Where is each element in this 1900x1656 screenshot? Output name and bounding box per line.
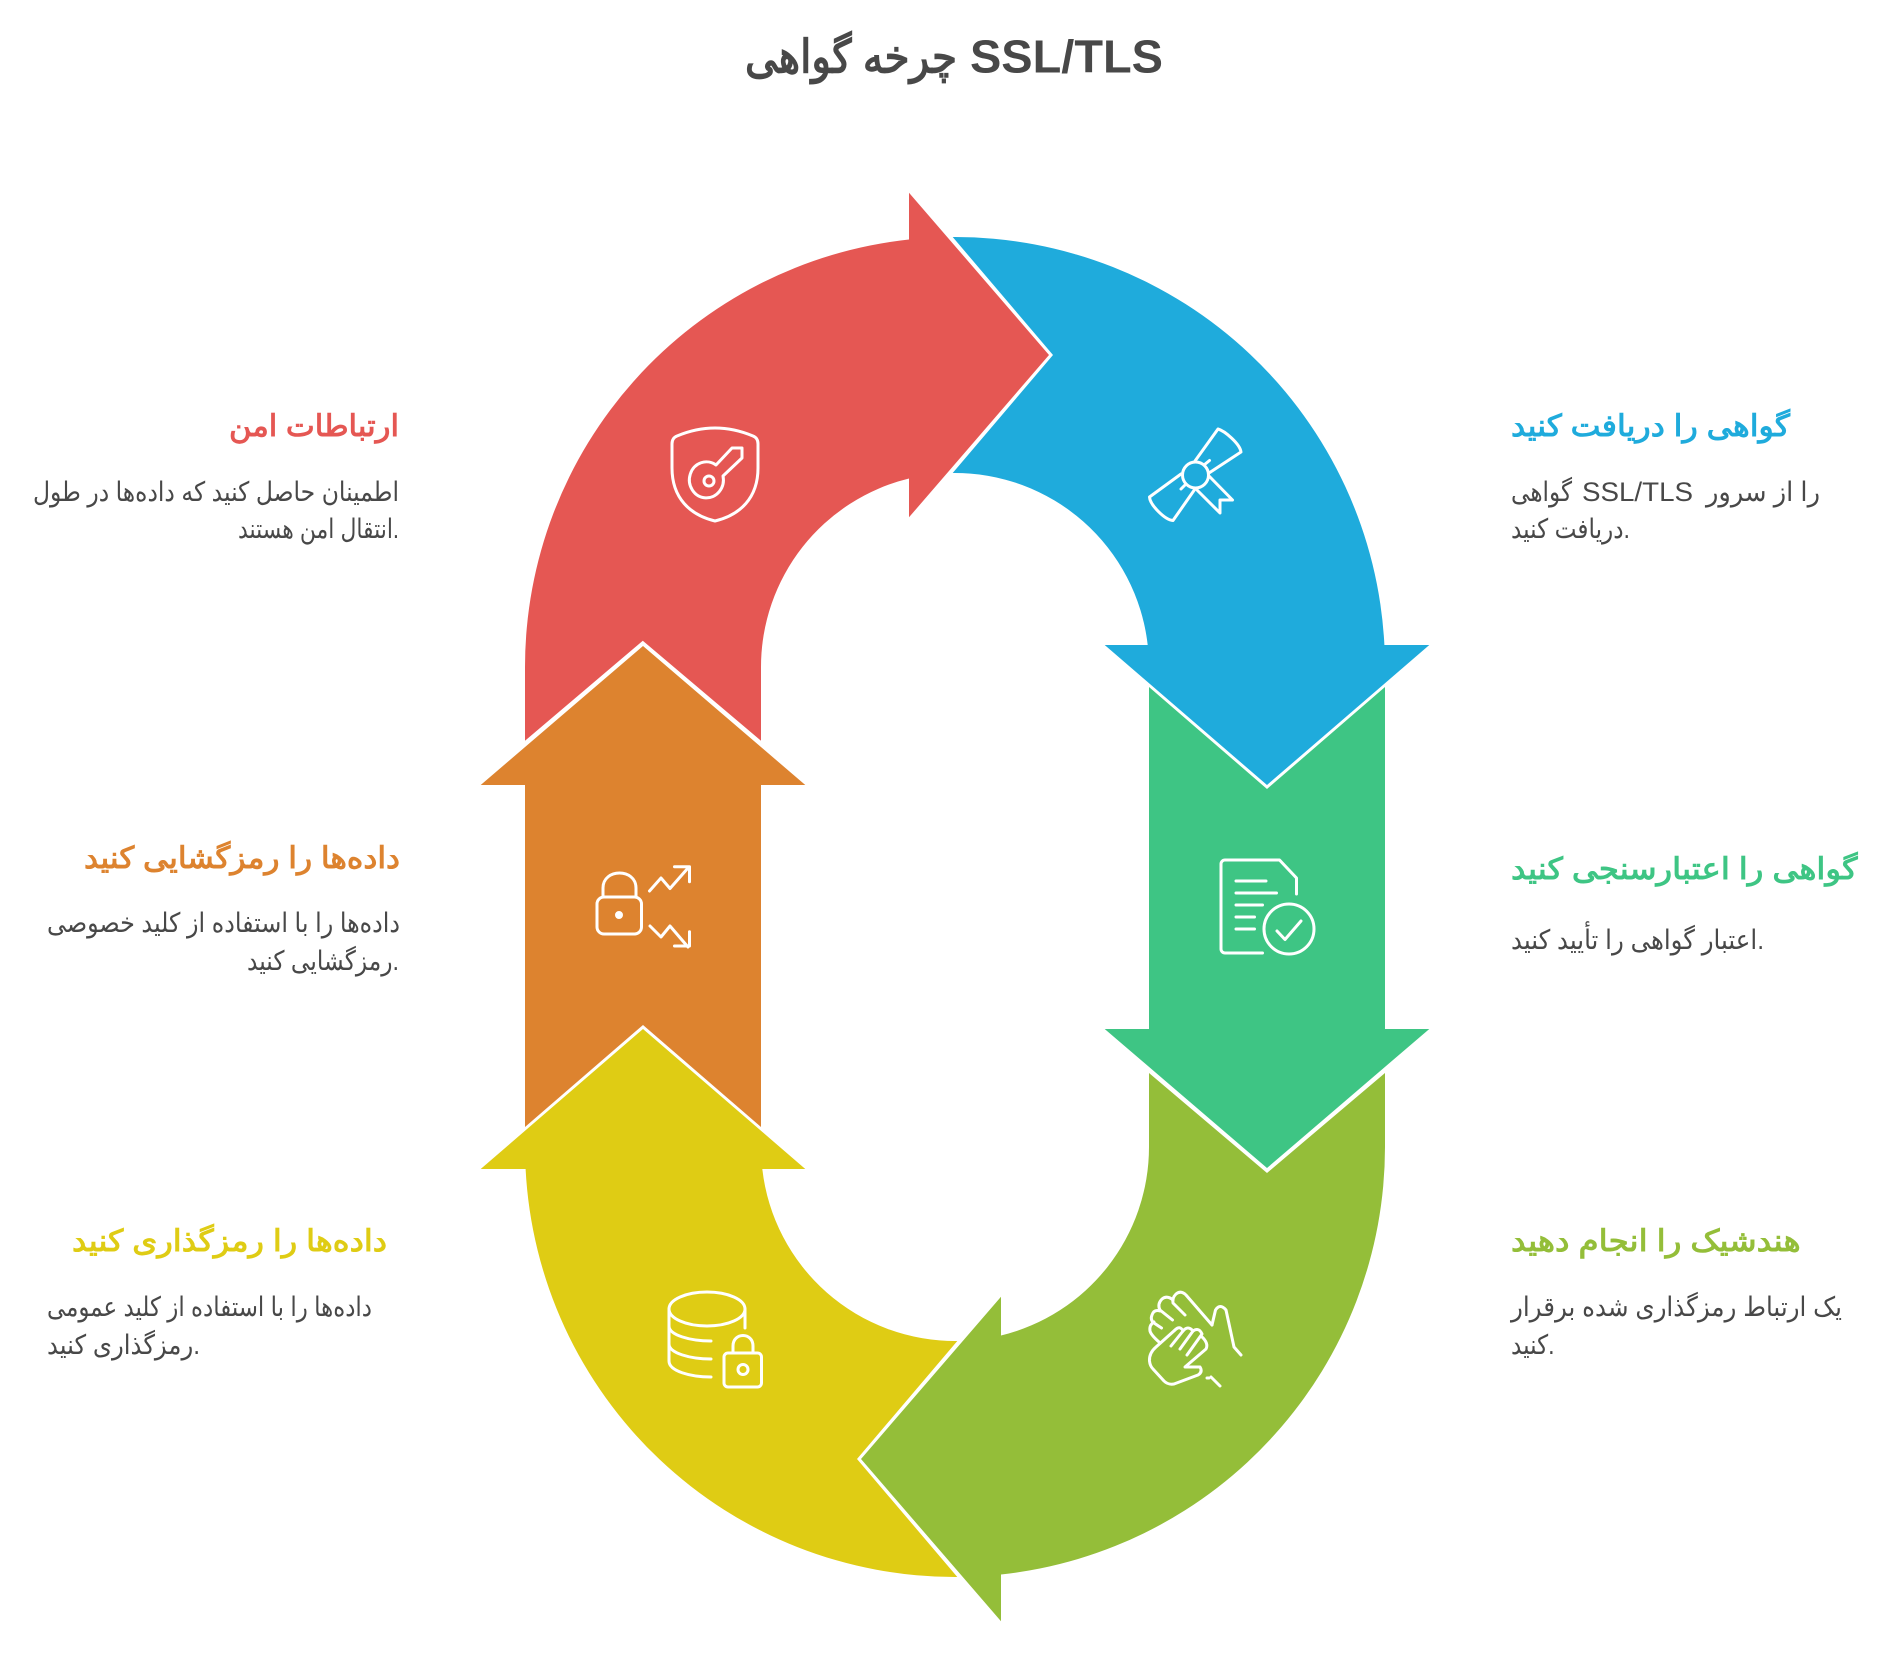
arrow: encrypt data (yellow) [481,1029,957,1577]
title: SSL/TLS [970,30,1163,82]
description: decrypt data: داده‌ها را با استفاده از کلید خصوصی [47,908,400,939]
arrow: secure communication (red) [525,193,1049,741]
text block: receive certificate [1511,408,1820,545]
text block: secure communication [33,410,399,545]
text block: encrypt data [47,1223,387,1361]
description: handshake: کنید. [1511,1330,1555,1360]
arrow: decrypt data (orange) [481,646,805,1127]
icon: handshake hands [1149,1292,1241,1386]
heading: decrypt data: داده‌ها را رمزگشایی کنید [84,840,400,876]
heading: validate certificate: گواهی را اعتبارسنجی کنید [1511,851,1858,887]
description: validate certificate: اعتبار گواهی را تأیید کنید. [1511,921,1764,956]
description: decrypt data: رمزگشایی کنید. [247,945,399,977]
description: encrypt data: رمزگذاری کنید. [47,1329,200,1361]
description: receive certificate: گواهی [1511,476,1572,508]
heading: secure communication: ارتباطات امن [229,410,399,444]
text block: handshake [1509,1225,1842,1360]
description: encrypt data [47,1292,372,1361]
description: secure communication [33,477,399,545]
description: decrypt data [47,908,400,977]
description: handshake [1509,1291,1842,1360]
arrow: handshake (olive) [861,1073,1385,1621]
icon: lock with up and down arrows [597,867,690,947]
arrow: validate certificate (green) [1105,687,1429,1168]
title [745,30,1163,84]
description: secure communication: انتقال امن هستند. [238,514,399,545]
title: چرخه گواهی [745,30,957,84]
description: receive certificate: SSL/TLS [1582,477,1693,507]
description: secure communication: اطمینان حاصل کنید که داده‌ها در طول [33,477,399,508]
text block: decrypt data [47,840,400,977]
description: receive certificate [1511,476,1820,545]
heading: handshake: هندشیک را انجام دهید [1511,1225,1801,1259]
description: handshake: یک ارتباط رمزگذاری شده برقرار [1509,1291,1842,1323]
icon: document with check [1221,860,1314,954]
icon: diploma scroll [1150,429,1241,520]
icon: shield with key [672,428,758,521]
description: receive certificate: را از سرور [1704,477,1820,508]
arrow: receive certificate (blue) [953,237,1429,785]
heading: encrypt data: داده‌ها را رمزگذاری کنید [72,1223,387,1259]
heading: receive certificate: گواهی را دریافت کنید [1511,408,1791,444]
description: receive certificate: دریافت کنید. [1511,514,1630,545]
icon: database with lock [669,1292,762,1387]
text block: validate certificate [1511,851,1858,956]
description: encrypt data: داده‌ها را با استفاده از کلید عمومی [47,1292,372,1323]
